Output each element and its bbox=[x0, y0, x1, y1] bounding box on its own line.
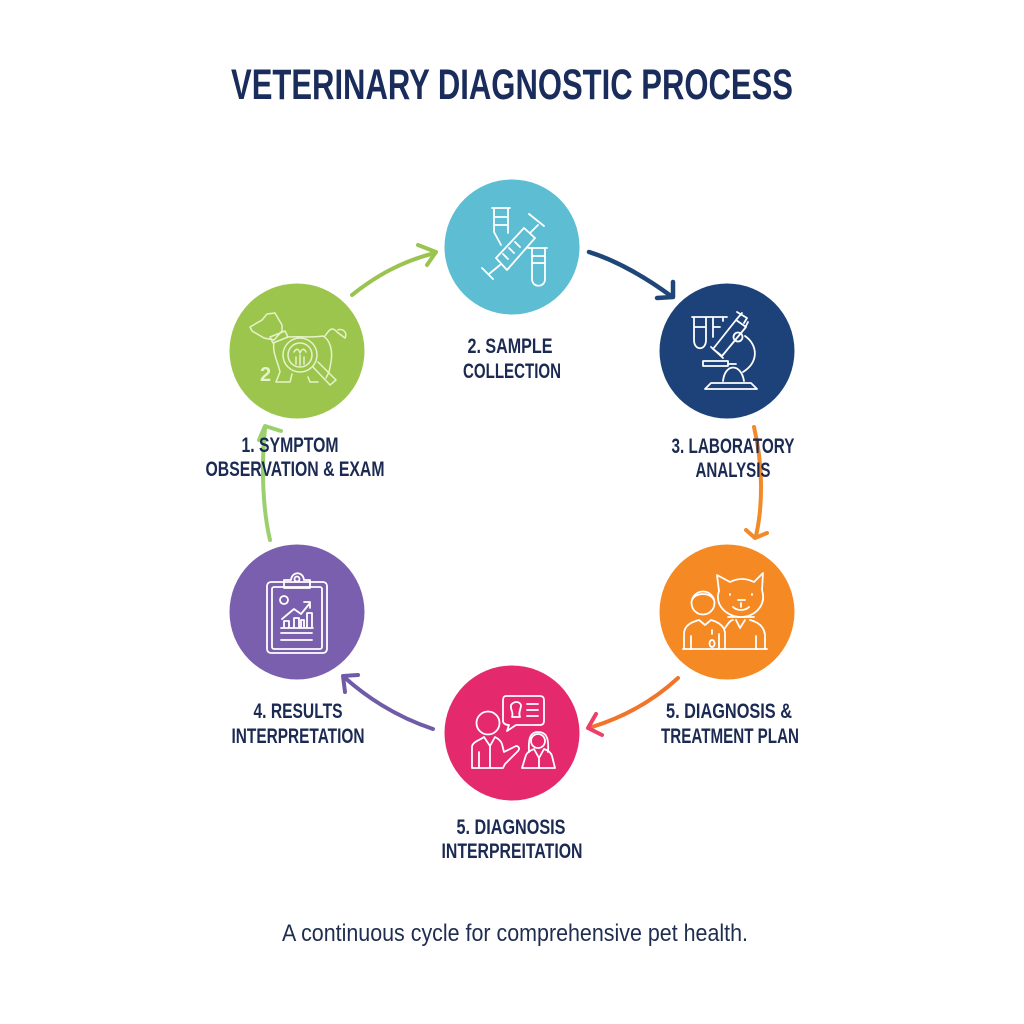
label 4 bbox=[232, 700, 364, 748]
arrow: step 2 to step 3 bbox=[589, 252, 673, 298]
label 1: OBSERVATION & EXAM bbox=[206, 458, 384, 481]
label 3: 3. LABORATORY bbox=[672, 435, 794, 458]
step 4: results interpretation bbox=[230, 544, 364, 748]
circle 5 diagnosis bbox=[444, 666, 580, 800]
label 2: 2. SAMPLE bbox=[468, 335, 552, 358]
step 1: symptom observation bbox=[206, 284, 384, 481]
icon: dog with magnifier bbox=[250, 313, 346, 385]
arrow: treatment to diagnosis bbox=[592, 678, 678, 727]
label 5 diagnosis: 5. DIAGNOSIS bbox=[456, 816, 566, 839]
circle 3 bbox=[660, 284, 794, 418]
label 5 diagnosis bbox=[442, 816, 582, 863]
circle 4 bbox=[230, 544, 364, 680]
arrow: step 1 to step 2 bbox=[352, 245, 436, 295]
label 5 treatment bbox=[661, 700, 799, 748]
icon: vet consulting client bbox=[472, 696, 555, 768]
label 3: ANALYSIS bbox=[696, 459, 770, 482]
icon: vet and dog bbox=[683, 573, 767, 649]
circle 5 treatment bbox=[660, 544, 794, 680]
arrow head: treatment to diagnosis bbox=[588, 714, 602, 735]
icon: microscope and tubes bbox=[692, 312, 757, 389]
label 5 diagnosis: INTERPREITATION bbox=[442, 840, 582, 863]
title: VETERINARY DIAGNOSTIC PROCESS bbox=[231, 61, 793, 109]
label 2: COLLECTION bbox=[463, 360, 561, 383]
label 1: 1. SYMPTOM bbox=[242, 434, 338, 457]
step 2: sample collection bbox=[444, 180, 580, 383]
icon: clipboard with chart bbox=[267, 573, 327, 653]
step 3: laboratory analysis bbox=[660, 284, 794, 482]
label 1 bbox=[206, 434, 384, 481]
arrow: step 3 to step 5 treatment bbox=[746, 427, 767, 538]
icon: syringe and tubes bbox=[482, 208, 547, 286]
arrow: results to symptom bbox=[259, 426, 281, 540]
step 5: diagnosis and treatment plan bbox=[660, 544, 799, 748]
label 5 treatment: 5. DIAGNOSIS & bbox=[666, 700, 792, 723]
label 4: 4. RESULTS bbox=[254, 700, 342, 723]
circle 2 bbox=[444, 180, 580, 314]
step 5: diagnosis interpretation bbox=[442, 666, 582, 863]
icon number: 2 bbox=[260, 364, 271, 386]
arrow: diagnosis to results bbox=[343, 675, 433, 729]
label 4: INTERPRETATION bbox=[232, 725, 364, 748]
tagline: A continuous cycle for comprehensive pet health. bbox=[282, 920, 748, 947]
label 3 bbox=[672, 435, 794, 482]
label 2 bbox=[463, 335, 561, 383]
circle 1 bbox=[230, 284, 364, 418]
label 5 treatment: TREATMENT PLAN bbox=[661, 725, 799, 748]
